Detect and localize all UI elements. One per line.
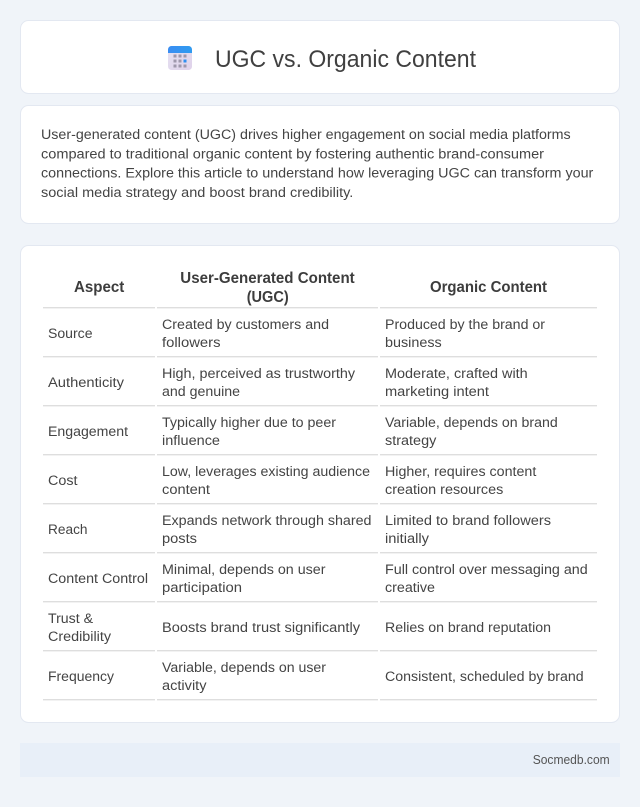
column heading: User-Generated Content bbox=[180, 270, 355, 306]
row: Authenticity: High, perceived as trustworthy bbox=[162, 366, 356, 382]
row: Content Control: Content Control bbox=[48, 571, 148, 587]
row: Content Control: creative bbox=[385, 580, 435, 596]
column heading: User-Generated Content: (UGC) bbox=[247, 289, 289, 306]
row: Source bbox=[48, 317, 545, 351]
text block: introduction paragraph: social media strategy and boost brand credibility. bbox=[41, 185, 353, 201]
row: Reach bbox=[48, 513, 551, 547]
footer source text: Socmedb.com bbox=[533, 753, 610, 767]
row: Source: Source bbox=[48, 326, 93, 342]
row: Trust and Credibility: Trust & bbox=[48, 611, 94, 627]
column heading: User-Generated Content: User-Generated Content bbox=[180, 270, 355, 287]
row: Source: business bbox=[385, 335, 442, 351]
title: UGC vs. Organic Content bbox=[215, 46, 476, 73]
row: Source: Created by customers and bbox=[162, 317, 329, 333]
row: Content Control: Full control over messaging and bbox=[385, 562, 588, 578]
row: Reach: Expands network through shared bbox=[162, 513, 372, 529]
row: Authenticity bbox=[48, 366, 528, 400]
panel: comparison table bbox=[20, 246, 620, 722]
row: Frequency bbox=[48, 660, 584, 694]
row: Source: followers bbox=[162, 335, 220, 351]
text block: introduction paragraph: User-generated content (UGC) drives higher engagement on social media platforms bbox=[41, 127, 571, 143]
row: Cost: Higher, requires content bbox=[385, 464, 536, 480]
row: Cost: Cost bbox=[48, 473, 78, 489]
row: Frequency: activity bbox=[162, 678, 207, 694]
row: Engagement: strategy bbox=[385, 433, 437, 449]
row: Engagement bbox=[48, 415, 558, 449]
row: Authenticity: Authenticity bbox=[48, 375, 125, 391]
text block: introduction paragraph bbox=[41, 127, 594, 201]
row: Trust and Credibility: Boosts brand trust significantly bbox=[162, 620, 361, 636]
text block: introduction paragraph: compared to traditional organic content by fostering authentic brand-consumer bbox=[41, 146, 544, 162]
row: Reach: Limited to brand followers bbox=[385, 513, 551, 529]
row: Reach: initially bbox=[385, 531, 430, 547]
row: Engagement: Typically higher due to peer bbox=[162, 415, 336, 431]
row: Frequency: Consistent, scheduled by brand bbox=[385, 669, 584, 685]
icon: calendar bbox=[168, 46, 192, 70]
panel: title header bbox=[20, 20, 620, 94]
row: Authenticity: Moderate, crafted with bbox=[385, 366, 528, 382]
row: Content Control: Minimal, depends on user bbox=[162, 562, 326, 578]
row: Content Control bbox=[48, 562, 588, 596]
row: Source: Produced by the brand or bbox=[385, 317, 545, 333]
footer bbox=[20, 743, 620, 777]
row: Frequency: Frequency bbox=[48, 669, 115, 685]
row: Cost bbox=[48, 464, 536, 498]
row: Cost: creation resources bbox=[385, 482, 503, 498]
table header row bbox=[74, 270, 547, 306]
row: Authenticity: marketing intent bbox=[385, 384, 489, 400]
row: Trust and Credibility: Relies on brand reputation bbox=[385, 620, 551, 636]
row: Authenticity: and genuine bbox=[162, 384, 240, 400]
column heading: Aspect: Aspect bbox=[74, 279, 124, 296]
row: Trust and Credibility bbox=[48, 611, 551, 645]
row: Cost: content bbox=[162, 482, 210, 498]
row: Engagement: Variable, depends on brand bbox=[385, 415, 558, 431]
row: Reach: Reach bbox=[48, 522, 88, 538]
row: Engagement: Engagement bbox=[48, 424, 128, 440]
row: Engagement: influence bbox=[162, 433, 220, 449]
column heading: Organic Content: Organic Content bbox=[430, 279, 547, 296]
row: Trust and Credibility: Credibility bbox=[48, 629, 112, 645]
text block: introduction paragraph: connections. Explore this article to understand how leveraging UGC can transform your bbox=[41, 166, 594, 182]
row: Content Control: participation bbox=[162, 580, 242, 596]
panel: introduction bbox=[20, 106, 620, 224]
row: Reach: posts bbox=[162, 531, 197, 547]
row: Frequency: Variable, depends on user bbox=[162, 660, 326, 676]
row: Cost: Low, leverages existing audience bbox=[162, 464, 370, 480]
